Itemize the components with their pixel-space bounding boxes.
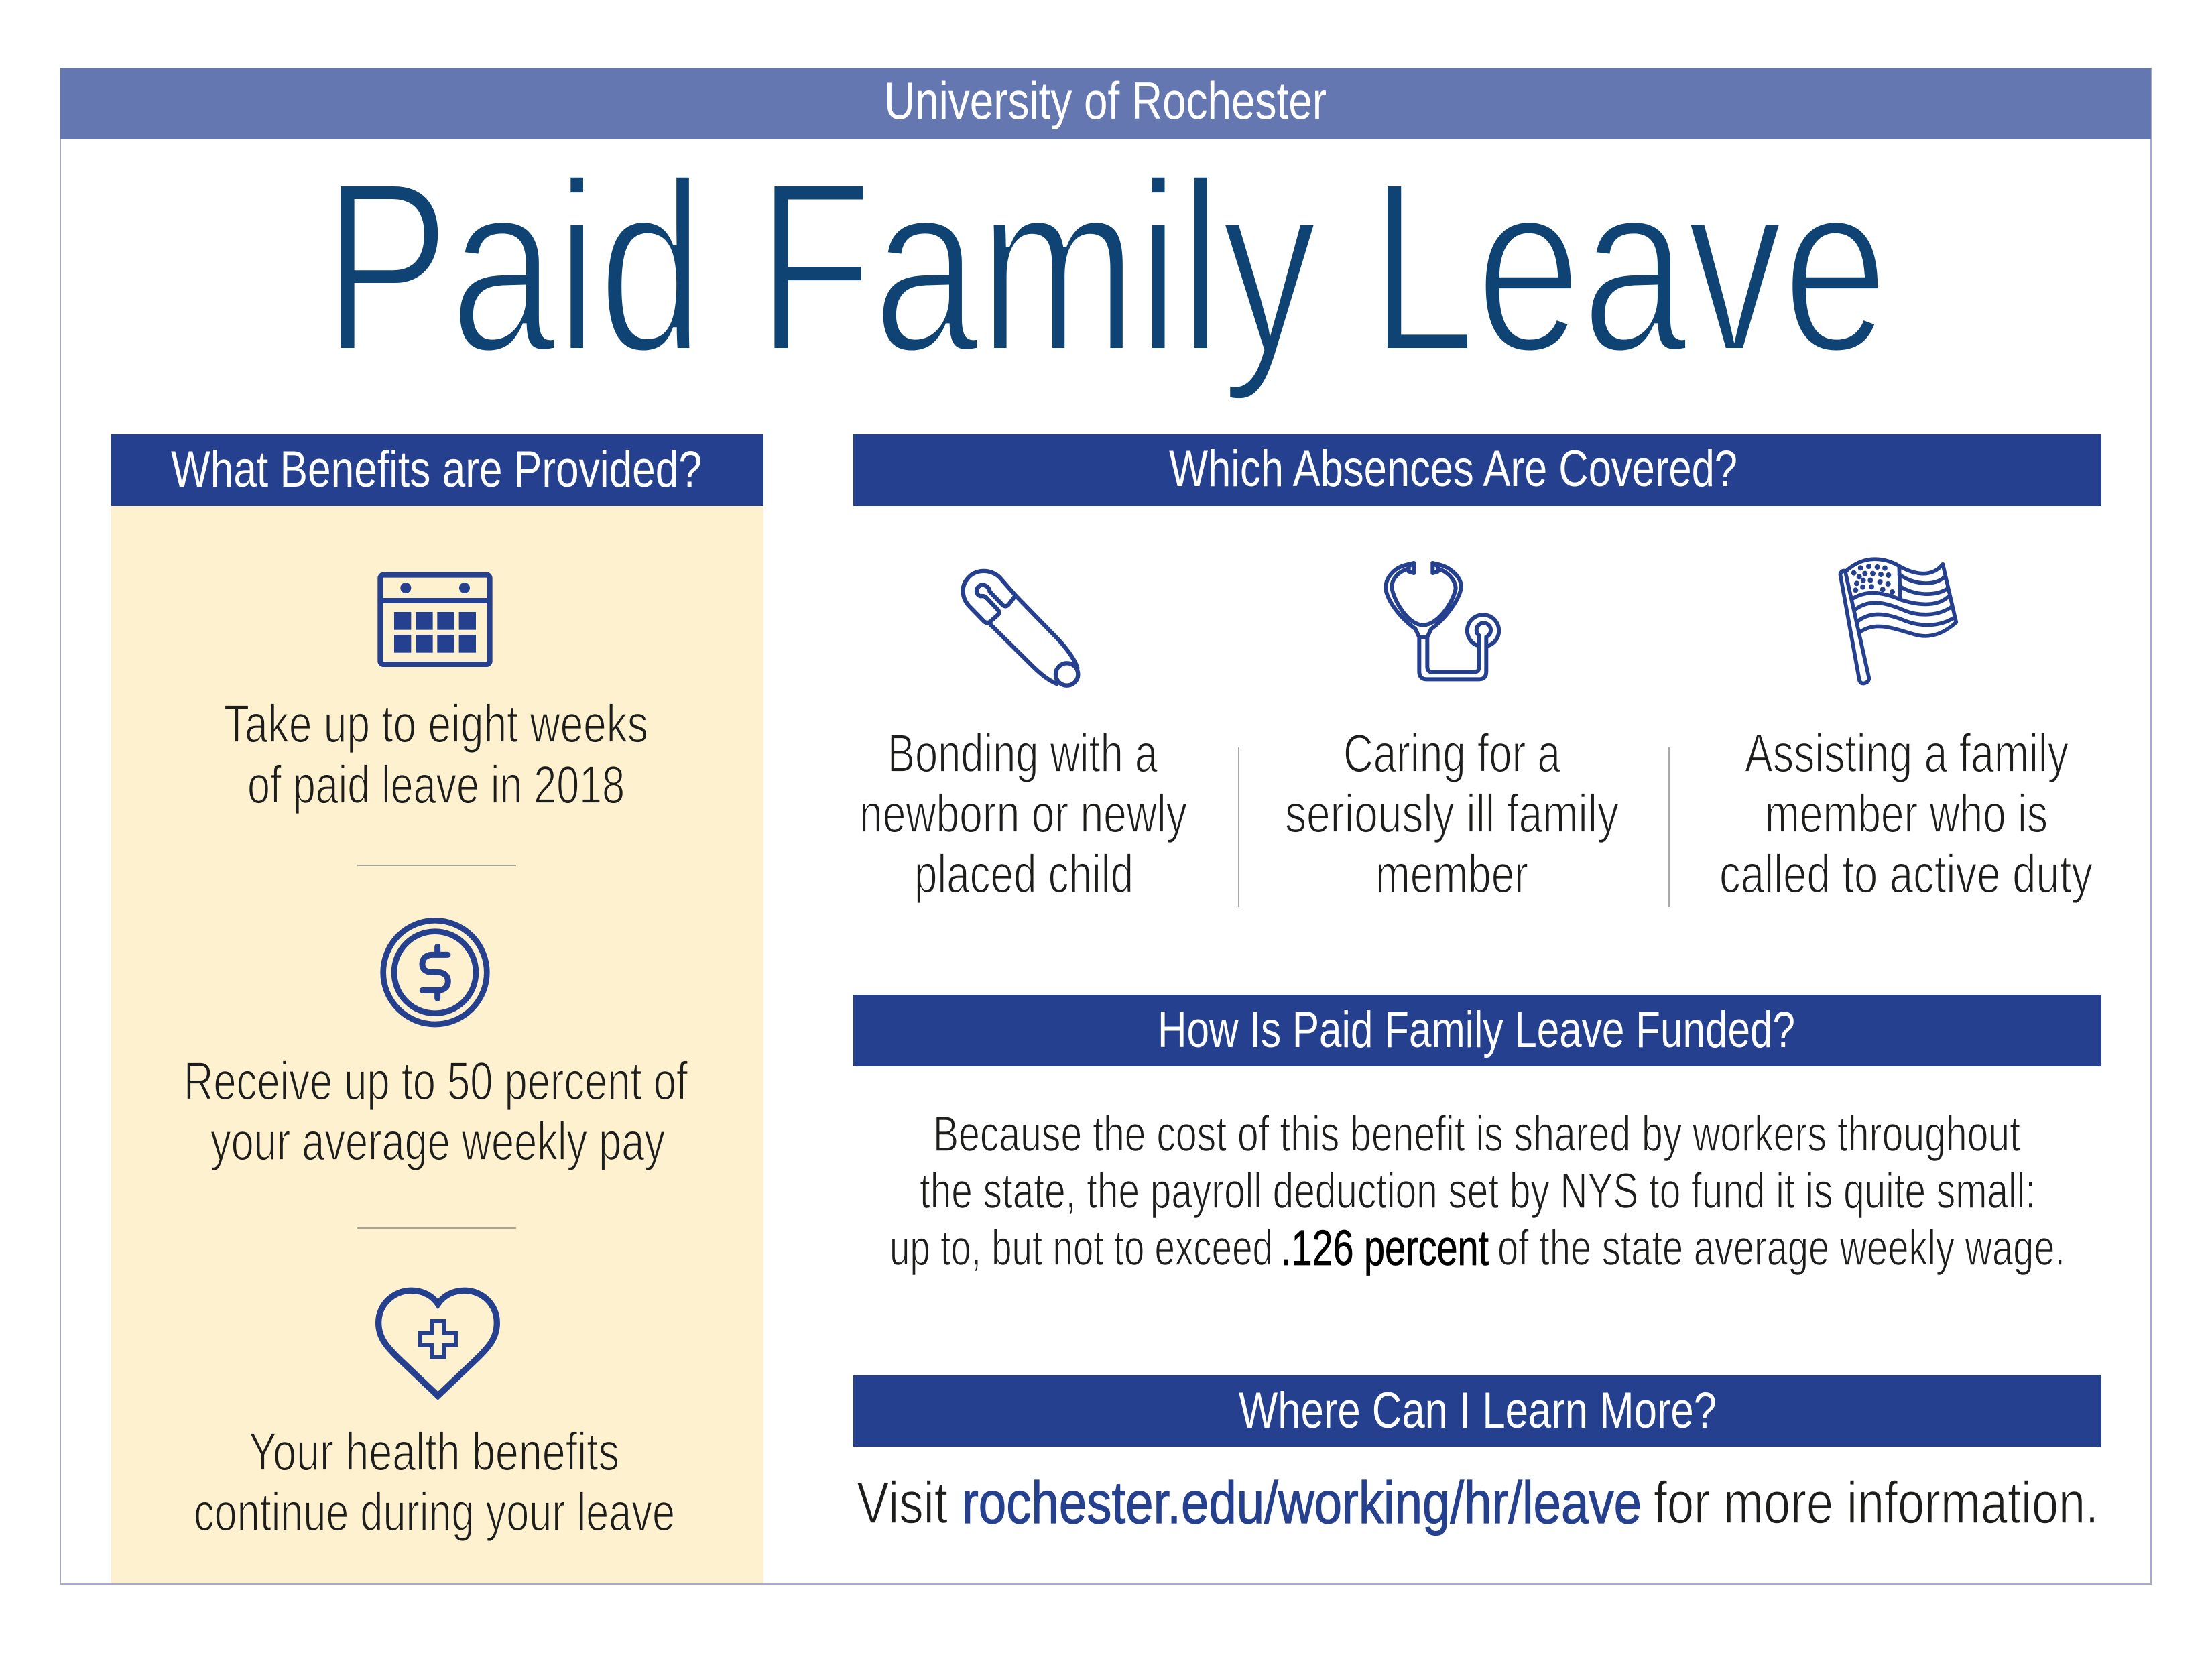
text: bonding: placed child bbox=[914, 844, 1133, 904]
text: bonding: newborn or newly bbox=[859, 784, 1187, 843]
text: caring bbox=[1285, 723, 1619, 904]
text: visit link: rochester.edu/working/hr/leave bbox=[962, 1469, 1642, 1536]
text: caring: seriously ill family bbox=[1285, 784, 1619, 843]
heading: learn more bbox=[853, 1375, 2101, 1447]
text: assisting bbox=[1719, 723, 2093, 904]
text: visit link bbox=[857, 1469, 2099, 1536]
text: fifty percent: Receive up to 50 percent of bbox=[184, 1051, 688, 1111]
text: eight weeks bbox=[224, 694, 648, 814]
heading: funding bbox=[853, 995, 2101, 1066]
text: assisting: called to active duty bbox=[1719, 844, 2093, 904]
text: assisting: Assisting a family bbox=[1745, 723, 2069, 783]
icon: dollar coin bbox=[383, 920, 487, 1024]
top band: University of Rochester bbox=[60, 68, 2151, 139]
top band: University of Rochester: University of Rochester bbox=[884, 71, 1327, 130]
text: assisting: member who is bbox=[1765, 784, 2048, 843]
text: fifty percent bbox=[184, 1051, 688, 1171]
heading: absences: Which Absences Are Covered? bbox=[1169, 440, 1737, 497]
text: funding explanation: .126 percent bbox=[1281, 1220, 1489, 1276]
text: funding explanation: up to, but not to exceed bbox=[889, 1220, 1273, 1276]
text: eight weeks: of paid leave in 2018 bbox=[247, 755, 625, 814]
text: funding explanation bbox=[889, 1106, 2065, 1276]
text: health benefits: continue during your leave bbox=[194, 1482, 675, 1542]
text: bonding: Bonding with a bbox=[887, 723, 1158, 783]
panel background bbox=[111, 505, 763, 1583]
heading: absences bbox=[853, 434, 2101, 506]
text: health benefits bbox=[194, 1422, 675, 1542]
text: fifty percent: your average weekly pay bbox=[210, 1111, 665, 1171]
heading: funding: How Is Paid Family Leave Funded? bbox=[1158, 1001, 1795, 1058]
heading: benefits bbox=[111, 434, 763, 506]
heading: learn more: Where Can I Learn More? bbox=[1239, 1382, 1717, 1439]
panel: benefits bbox=[111, 434, 763, 1583]
text: health benefits: Your health benefits bbox=[249, 1422, 619, 1481]
text: bonding bbox=[859, 723, 1187, 904]
icon: american flag bbox=[1840, 559, 1956, 684]
text: caring: Caring for a bbox=[1343, 723, 1560, 783]
text: visit link: for more information. bbox=[1654, 1469, 2099, 1536]
text: caring: member bbox=[1375, 844, 1528, 904]
text: visit link: Visit bbox=[857, 1469, 948, 1536]
text: eight weeks: Take up to eight weeks bbox=[224, 694, 648, 753]
icon: heart with cross bbox=[379, 1290, 497, 1396]
icon: calendar bbox=[380, 575, 490, 664]
heading: benefits: What Benefits are Provided? bbox=[171, 441, 702, 498]
icon: stethoscope bbox=[1386, 563, 1499, 679]
icon: safety pin bbox=[963, 571, 1078, 686]
